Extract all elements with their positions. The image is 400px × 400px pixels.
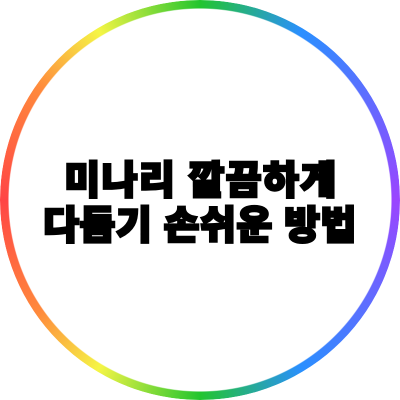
title xyxy=(43,159,357,248)
title line 2: 다듬기 손쉬운 방법 xyxy=(43,205,357,248)
title line 1: 미나리 깔끔하게 xyxy=(64,160,338,203)
